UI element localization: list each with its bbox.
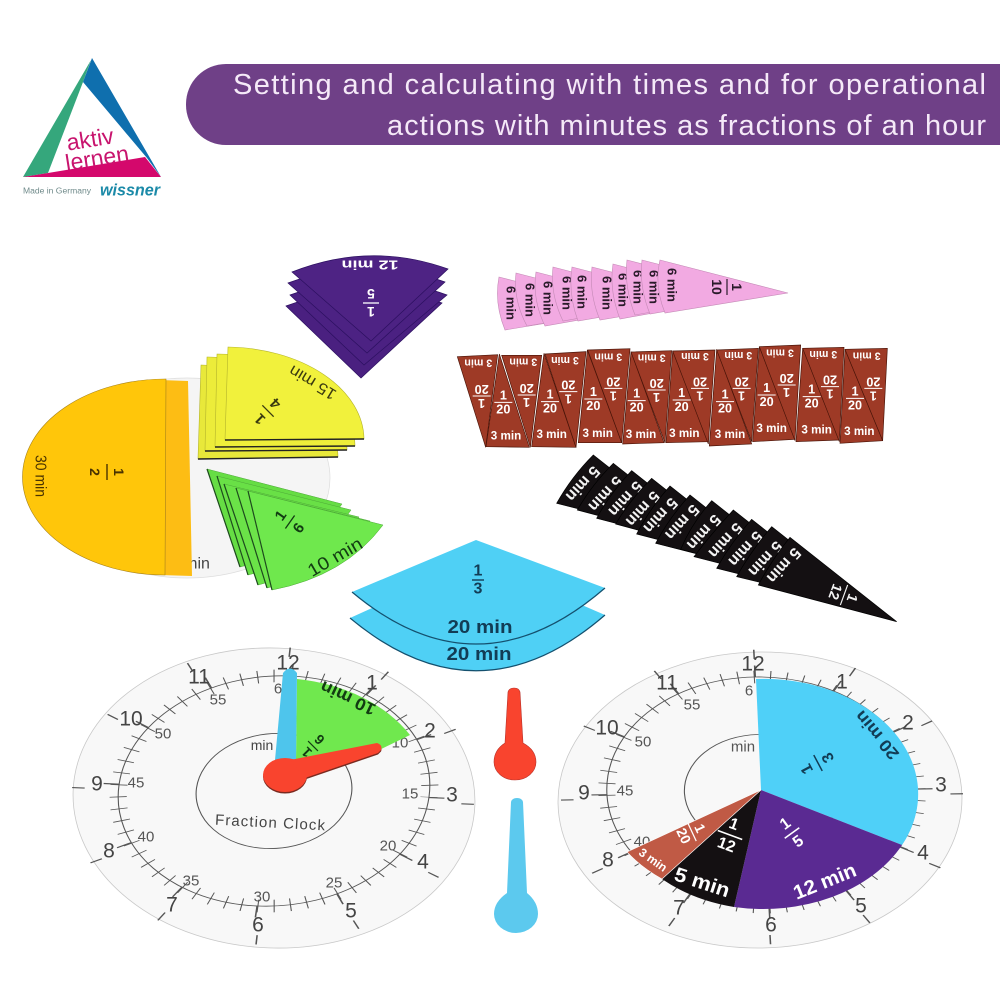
right clock hour numbers: 5 — [855, 894, 867, 918]
brown twentieth pieces: 1 — [590, 385, 597, 399]
light blue third pieces: 3 — [474, 580, 483, 598]
brown twentieth pieces: 1 — [851, 384, 859, 398]
left clock minute numbers: 20 — [380, 838, 396, 854]
brown twentieth sector: 20 — [673, 825, 694, 846]
left clock hour numbers: 6 — [252, 914, 264, 936]
brown twentieth pieces: 3 min — [801, 423, 832, 436]
black twelfth pieces: 5 min — [640, 494, 680, 536]
pink tenth pieces: 6 min — [600, 276, 614, 310]
brown twentieth pieces: 3 min — [491, 429, 521, 442]
brown twentieth pieces: 20 — [693, 374, 707, 388]
brown twentieth pieces: 1 — [870, 388, 877, 402]
left clock minute numbers — [128, 680, 418, 906]
white clock disc behind half pieces: min — [184, 556, 210, 572]
brown twentieth pieces: 1 — [721, 388, 729, 402]
brown twentieth pieces: 3 min — [669, 427, 700, 440]
left clock caption: Fraction Clock — [215, 812, 326, 834]
pink tenth pieces: 6 min — [540, 281, 556, 315]
purple fifth pieces: 12 min — [341, 258, 398, 272]
brown twentieth pieces: 20 — [780, 371, 794, 385]
left fraction clock — [63, 641, 483, 955]
light blue third pieces: 1 — [474, 562, 483, 580]
left clock hour numbers: 11 — [188, 666, 210, 688]
yellow quarter pieces: 15 min — [286, 361, 340, 403]
brown twentieth pieces: 20 — [496, 402, 510, 416]
purple fifth sector — [734, 790, 902, 909]
brown twentieth pieces: 3 min — [536, 428, 567, 441]
brown twentieth pieces: 20 — [650, 376, 664, 390]
brown twentieth pieces: 1 — [478, 396, 485, 410]
brown twentieth pieces: 3 min — [551, 354, 579, 366]
brown twentieth pieces — [457, 345, 887, 447]
right clock minute numbers: 50 — [635, 734, 651, 750]
right clock hour numbers: 1 — [836, 670, 848, 694]
header banner: actions with minutes as fractions of an hour — [387, 110, 986, 142]
header banner: Setting and calculating with times and for operational — [233, 69, 986, 101]
brown twentieth pieces: 3 min — [638, 351, 666, 363]
pink tenth pieces: 6 min — [560, 276, 574, 310]
light blue third pieces: 20 min — [448, 617, 512, 637]
purple fifth pieces: 1 — [367, 304, 375, 320]
left clock hour numbers: 5 — [345, 900, 357, 922]
pink tenth pieces: 1 — [729, 283, 745, 291]
logo: aktiv lernen wissner — [23, 58, 161, 200]
purple fifth sector: 12 min — [790, 859, 860, 905]
left clock minute numbers: 30 — [254, 888, 270, 906]
brown twentieth pieces: 3 min — [681, 350, 709, 362]
brown twentieth pieces: 1 — [633, 387, 640, 401]
black twelfth pieces: 5 min — [725, 527, 765, 569]
blue third sector: 3 — [819, 749, 838, 765]
brown twentieth pieces: 1 — [808, 383, 815, 397]
green sixth sector on clock — [296, 677, 410, 763]
brown twentieth pieces: 3 min — [594, 351, 622, 363]
left clock hour numbers: 3 — [446, 784, 458, 806]
brown twentieth pieces: 3 min — [766, 346, 794, 358]
brown twentieth pieces: 3 min — [626, 428, 656, 441]
left clock minute numbers: 40 — [138, 828, 154, 846]
brown twentieth pieces: 1 — [763, 381, 770, 395]
blue third sector: 1 — [798, 761, 817, 777]
right clock minute numbers: min — [731, 738, 755, 756]
left clock hour numbers: 1 — [366, 672, 378, 694]
green sixth sector on clock: 1 — [298, 744, 315, 761]
brown twentieth pieces: 20 — [520, 381, 534, 395]
left clock minute numbers: 15 — [402, 786, 418, 802]
brown twentieth pieces: 20 — [475, 382, 489, 396]
brown twentieth pieces: 1 — [500, 388, 507, 402]
green sixth pieces: 6 — [290, 520, 308, 537]
brown twentieth pieces: 20 — [543, 402, 557, 416]
pink tenth pieces: 6 min — [574, 275, 590, 309]
left clock minute numbers: 10 — [392, 734, 408, 752]
brown twentieth pieces: 1 — [610, 388, 617, 402]
right clock disc — [555, 648, 965, 952]
right clock minute numbers: 6 — [745, 682, 753, 700]
pink tenth pieces: 6 min — [616, 273, 630, 307]
orange half pieces — [22, 379, 192, 576]
yellow quarter pieces: 4 — [266, 394, 285, 412]
right clock minute numbers: 45 — [617, 782, 633, 800]
purple fifth sector: 1 — [777, 815, 794, 834]
brown twentieth pieces: 20 — [718, 402, 732, 416]
brown twentieth pieces: 20 — [561, 378, 575, 392]
right clock hour numbers — [578, 652, 947, 936]
right clock hour numbers: 6 — [765, 914, 777, 936]
purple fifth pieces — [286, 256, 448, 378]
orange half pieces: 30 min — [32, 455, 48, 497]
left clock minute numbers: 6 — [274, 680, 282, 698]
right clock minute numbers: 55 — [684, 696, 700, 714]
pink tenth pieces: 6 min — [664, 268, 680, 302]
black twelfth pieces — [557, 455, 897, 622]
brown twentieth pieces: 3 min — [509, 356, 537, 368]
brown twentieth pieces: 20 — [866, 374, 880, 388]
purple fifth pieces: 5 — [367, 286, 375, 302]
brown twentieth pieces: 1 — [783, 385, 790, 399]
brown twentieth pieces: 1 — [738, 388, 745, 402]
right clock hour numbers: 9 — [578, 782, 590, 804]
brown twentieth pieces: 3 min — [844, 425, 875, 438]
brown twentieth pieces: 3 min — [464, 357, 492, 369]
brown twentieth pieces: 3 min — [715, 428, 745, 441]
logo: aktiv lernen wissner: lernen — [63, 140, 131, 176]
left clock minute numbers: 55 — [210, 692, 226, 708]
white clock disc behind half pieces — [44, 378, 330, 578]
brown twentieth pieces: 1 — [565, 392, 572, 406]
brown twentieth pieces: 1 — [826, 387, 834, 401]
black twelfth sector: 1 — [727, 815, 741, 834]
brown twentieth sector — [627, 790, 761, 879]
green sixth sector on clock: 6 — [311, 731, 328, 748]
pink tenth pieces: 6 min — [504, 286, 518, 320]
left clock minute numbers: 25 — [326, 874, 342, 892]
left clock hour numbers: 9 — [91, 772, 103, 796]
black twelfth pieces: 5 min — [622, 487, 663, 529]
brown twentieth pieces: 20 — [823, 373, 837, 387]
red hand on clock — [263, 743, 382, 794]
orange half pieces: 2 — [87, 468, 103, 476]
brown twentieth sector: 3 min — [636, 845, 670, 875]
black twelfth pieces: 1 — [844, 592, 861, 605]
brown twentieth pieces: 1 — [523, 395, 530, 409]
light blue third pieces: 20 min — [446, 644, 512, 664]
black twelfth pieces: 5 min — [763, 544, 804, 586]
brown twentieth pieces: 20 — [848, 398, 862, 412]
header banner — [186, 64, 1000, 145]
black twelfth pieces: 5 min — [605, 477, 645, 519]
left clock disc — [68, 641, 480, 955]
left clock hour numbers: 2 — [424, 720, 436, 742]
right clock hour numbers: 3 — [935, 774, 947, 796]
left clock minute numbers: 45 — [128, 774, 144, 792]
left clock hour numbers: 12 — [276, 652, 300, 674]
logo: aktiv lernen wissner: aktiv — [65, 122, 116, 156]
right clock hour numbers: 4 — [917, 842, 929, 864]
brown twentieth pieces: 20 — [805, 397, 819, 411]
right clock hour numbers: 2 — [902, 712, 914, 734]
brown twentieth pieces: 1 — [546, 388, 554, 402]
black twelfth pieces: 5 min — [661, 501, 702, 543]
loose red hand — [494, 688, 536, 780]
blue third sector: 20 min — [851, 707, 903, 763]
left clock minute numbers: 35 — [183, 872, 199, 890]
right clock hour numbers: 11 — [656, 672, 678, 694]
black twelfth pieces: 12 — [825, 582, 846, 602]
black twelfth pieces: 5 min — [562, 462, 603, 504]
black twelfth sector: 5 min — [671, 864, 733, 902]
brown twentieth pieces: 20 — [735, 374, 749, 388]
black twelfth pieces: 5 min — [585, 472, 625, 514]
blue third sector — [756, 679, 918, 845]
yellow quarter pieces: 1 — [251, 410, 269, 428]
right clock minute numbers: 40 — [634, 834, 650, 850]
pink tenth pieces: 6 min — [646, 270, 662, 304]
left clock hour numbers: 10 — [119, 708, 143, 730]
green sixth pieces — [207, 469, 383, 590]
right clock hour numbers: 8 — [602, 848, 614, 872]
left clock caption: min — [251, 737, 273, 753]
brown twentieth sector: 1 — [691, 821, 709, 835]
brown twentieth pieces: 3 min — [724, 349, 752, 361]
black twelfth sector: 12 — [715, 834, 738, 856]
brown twentieth pieces: 1 — [678, 386, 685, 400]
right clock minute numbers — [617, 682, 755, 850]
left clock hour numbers: 7 — [166, 894, 178, 916]
right clock hour numbers: 10 — [595, 716, 619, 740]
brown twentieth pieces: 3 min — [756, 422, 787, 435]
brown twentieth pieces: 20 — [606, 374, 620, 388]
brown twentieth pieces: 1 — [653, 390, 660, 404]
brown twentieth pieces: 20 — [760, 395, 774, 409]
right clock hour numbers: 12 — [741, 652, 765, 676]
green sixth sector on clock: 10 min — [317, 677, 379, 719]
left clock hour numbers — [91, 652, 458, 936]
green sixth pieces: 1 — [272, 507, 290, 524]
left clock caption — [215, 737, 326, 834]
left clock minute numbers: 50 — [155, 726, 171, 742]
brown twentieth pieces: 20 — [675, 400, 689, 414]
brown twentieth pieces: 1 — [696, 388, 704, 402]
orange half pieces: 1 — [111, 468, 127, 476]
brown twentieth pieces: 20 — [586, 399, 600, 413]
black twelfth pieces: 5 min — [745, 537, 785, 579]
right clock hour numbers: 7 — [673, 896, 685, 920]
pink tenth pieces: 10 — [709, 279, 725, 295]
brown twentieth pieces: 3 min — [809, 348, 837, 360]
left clock hour numbers: 8 — [103, 840, 115, 862]
yellow quarter pieces — [198, 347, 364, 459]
brown twentieth pieces: 3 min — [582, 427, 613, 440]
logo: aktiv lernen wissner: wissner — [100, 180, 161, 200]
black twelfth pieces: 5 min — [683, 511, 724, 553]
brown twentieth pieces: 3 min — [853, 349, 881, 361]
left clock hour numbers: 4 — [417, 850, 429, 874]
pink tenth pieces — [497, 260, 788, 330]
loose blue hand — [494, 798, 538, 933]
right fraction clock — [555, 648, 966, 952]
brown twentieth pieces: 20 — [630, 401, 644, 415]
blue hand on clock — [275, 668, 297, 762]
green sixth pieces: 10 min — [304, 533, 366, 581]
black twelfth sector — [662, 790, 761, 907]
light blue third pieces — [350, 540, 605, 671]
pink tenth pieces: 6 min — [522, 283, 538, 317]
purple fifth sector: 5 — [790, 832, 807, 851]
logo: aktiv lernen wissner: Made in Germany — [23, 186, 91, 196]
pink tenth pieces: 6 min — [630, 270, 646, 304]
black twelfth pieces: 5 min — [705, 519, 745, 561]
